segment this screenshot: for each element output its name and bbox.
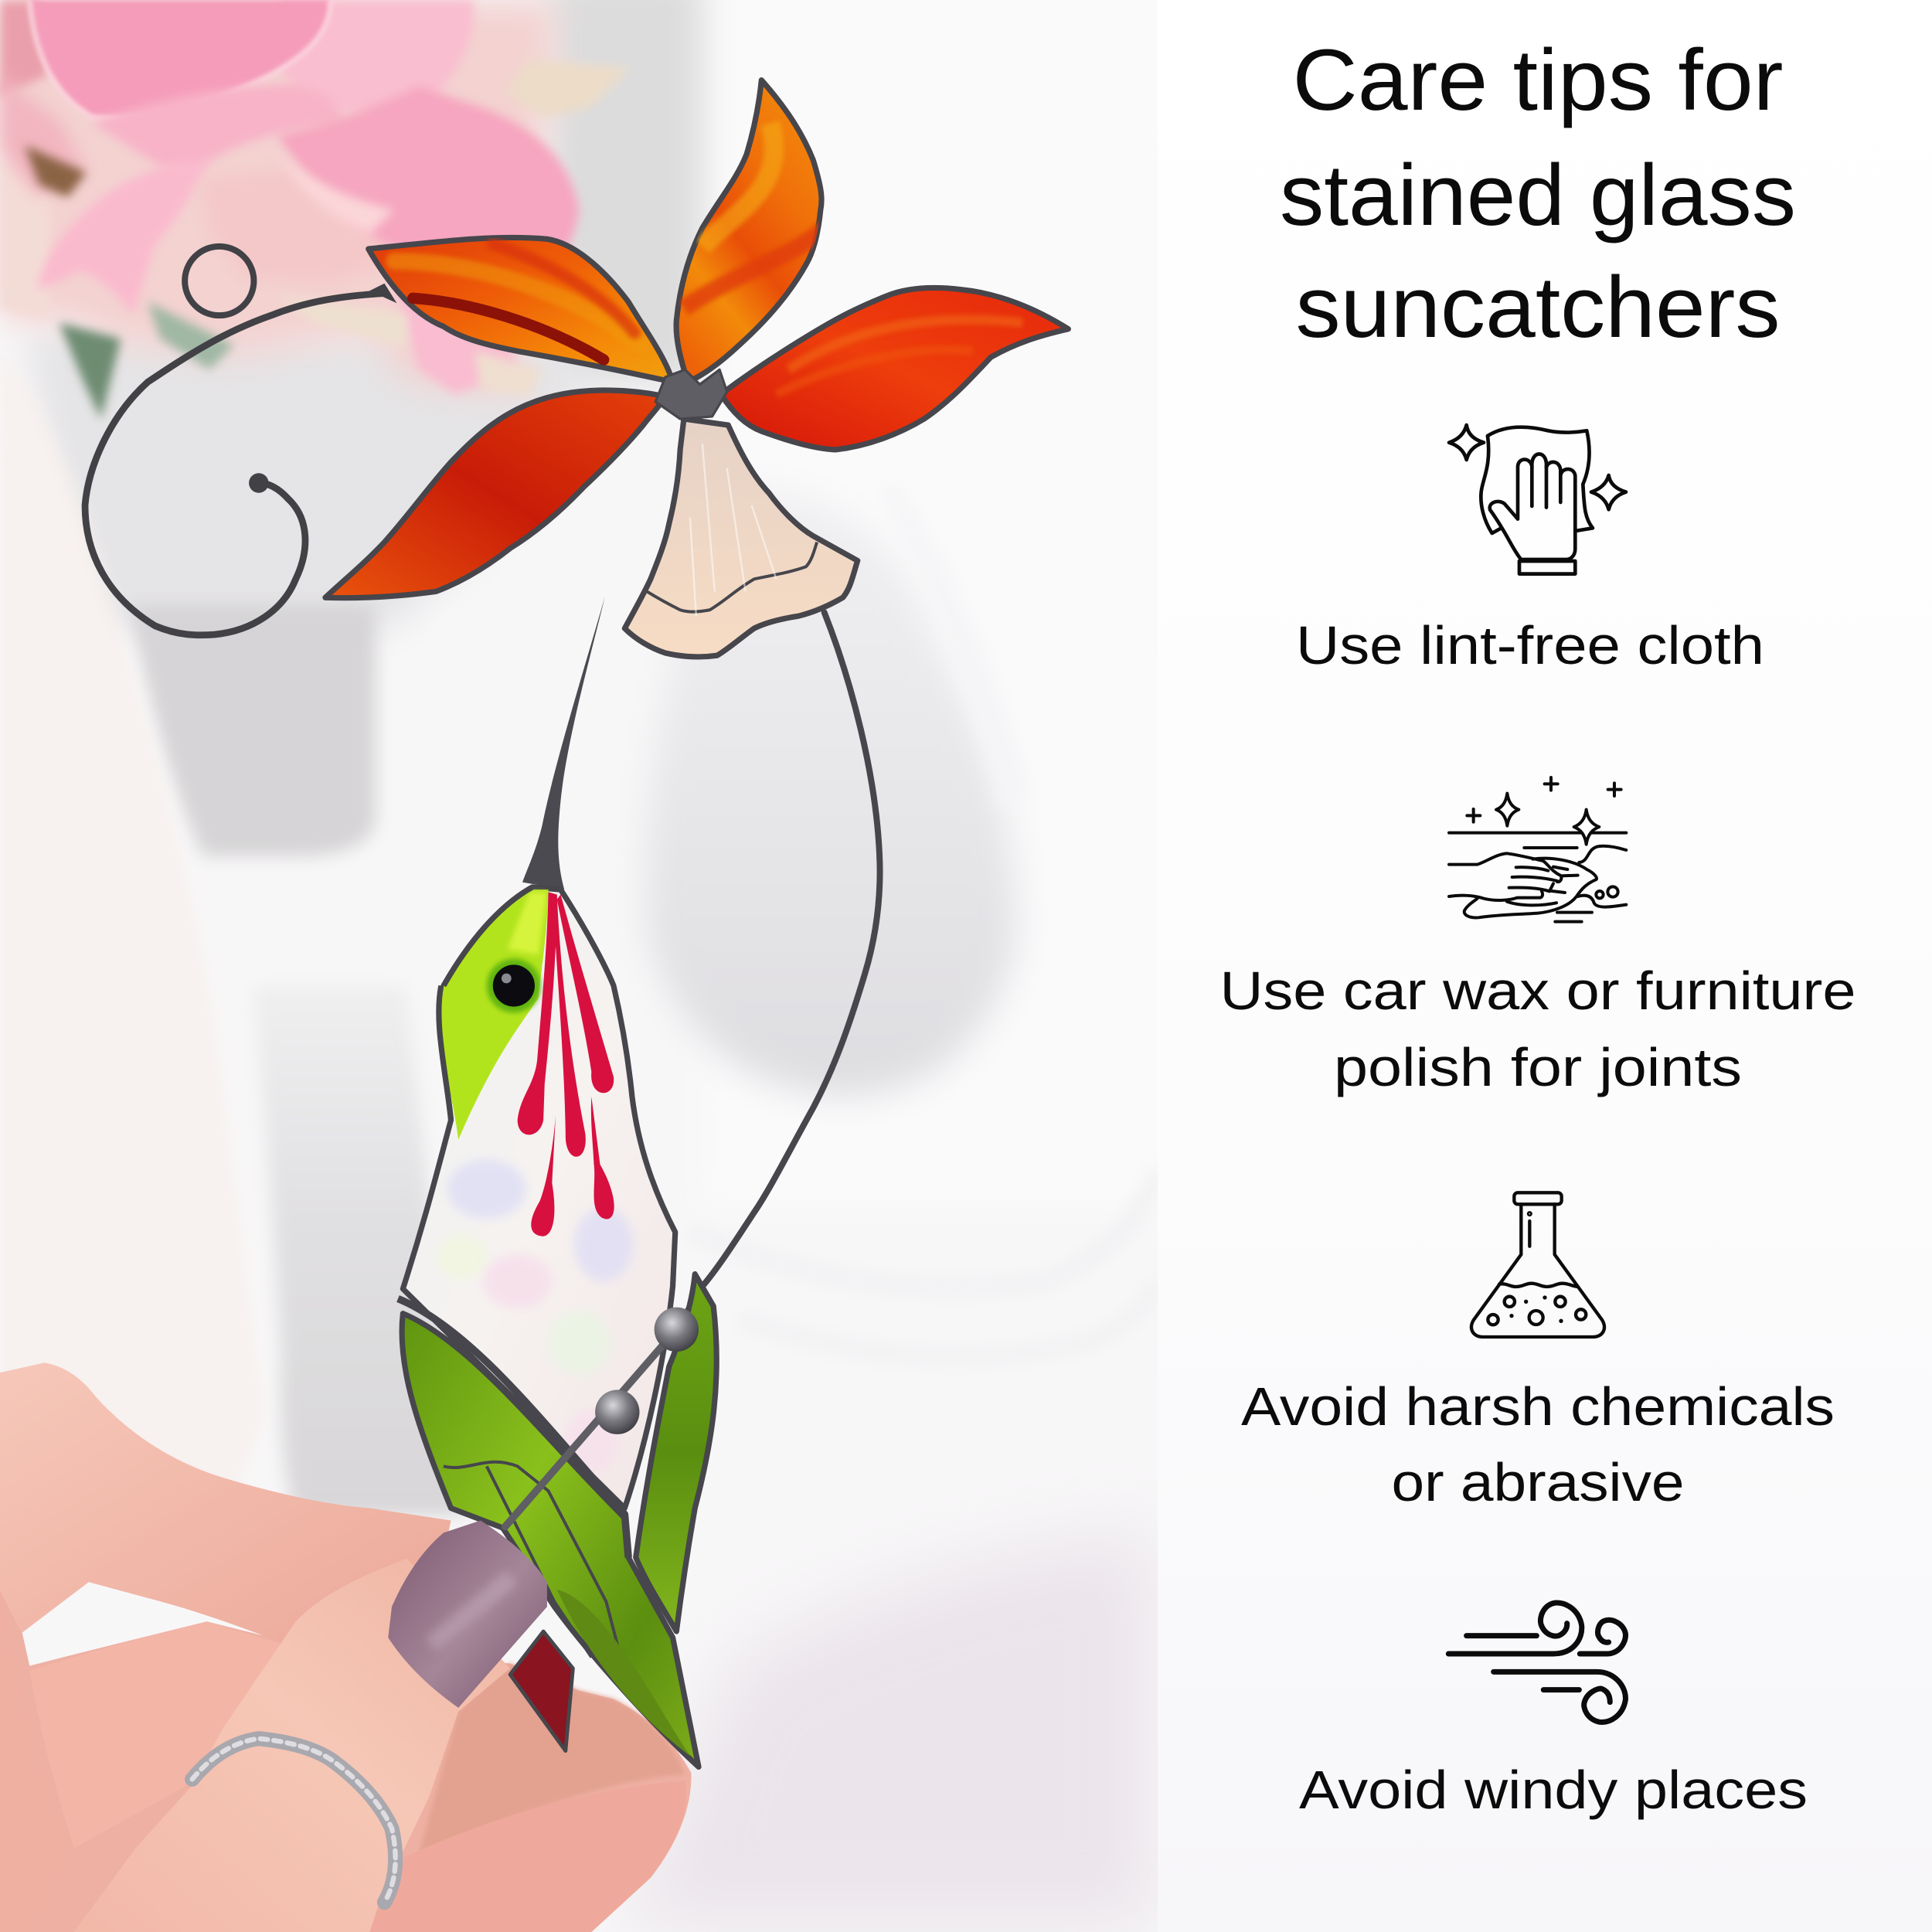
tip text: car wax or furniture polish: Use car wax or furniture [1219,961,1856,1021]
icon: hand polishing surface [1449,777,1626,922]
stained glass hook wire with ring [85,247,396,635]
tip text: avoid harsh chemicals: or abrasive [1391,1452,1685,1512]
iridescent patches on body [437,1159,634,1474]
wing feather lines [444,1462,628,1687]
petal: upper left [369,237,673,382]
tip text: car wax or furniture polish: polish for joints [1334,1037,1742,1097]
hummingbird [398,597,716,1767]
hand: palm and lower fingers behind the bird [0,1590,692,1932]
wire ball joints [505,1308,699,1526]
stained glass flower [325,80,1068,657]
hummingbird beak [522,597,605,889]
photo: hummingbird suncatcher held in hand [0,0,1183,1932]
petal: right [721,287,1068,450]
hand: thumb [74,1559,510,1932]
hummingbird tail [510,1631,573,1751]
tip text: car wax or furniture polish [1219,961,1856,1097]
hummingbird right wing [636,1274,716,1631]
icon: chemical flask [1471,1192,1604,1337]
flower centre solder [655,369,727,419]
title: stained glass [1280,147,1796,243]
petal: top [676,80,825,382]
hummingbird eye [487,958,541,1013]
title [1280,32,1796,355]
panel: care tips [1158,0,1932,1932]
hand: index finger and thumb in front of the bird [0,1362,547,1932]
icon: hand wiping with cloth [1449,425,1626,574]
tip text: avoid windy places: Avoid windy places [1299,1760,1808,1820]
hand: shaded upper palm [419,1663,685,1855]
hummingbird left wing [402,1314,699,1767]
icon: wind gusts [1448,1603,1626,1722]
photo background: blurred white vase and towel [0,0,1183,1932]
tip text: avoid harsh chemicals [1241,1376,1835,1512]
hand: left side of palm [0,1590,74,1932]
hand: middle finger [177,1621,209,1629]
thumb nail [388,1520,547,1708]
title: suncatchers [1295,259,1781,355]
tip text: lint-free cloth: Use lint-free cloth [1296,615,1764,675]
hummingbird green head [440,889,549,1140]
flower stem wire [503,612,880,1528]
flower bell [624,419,858,657]
hummingbird body [403,887,675,1509]
hand: index finger [0,1362,451,1642]
ring [192,1739,396,1903]
title: Care tips for [1292,32,1784,128]
petal: lower left [325,390,665,598]
hand: lower finger [422,1812,671,1932]
hummingbird red throat streaks [518,892,614,1236]
tip text: avoid harsh chemicals: Avoid harsh chemicals [1241,1376,1835,1437]
photo background: pink lily flowers [0,0,631,419]
